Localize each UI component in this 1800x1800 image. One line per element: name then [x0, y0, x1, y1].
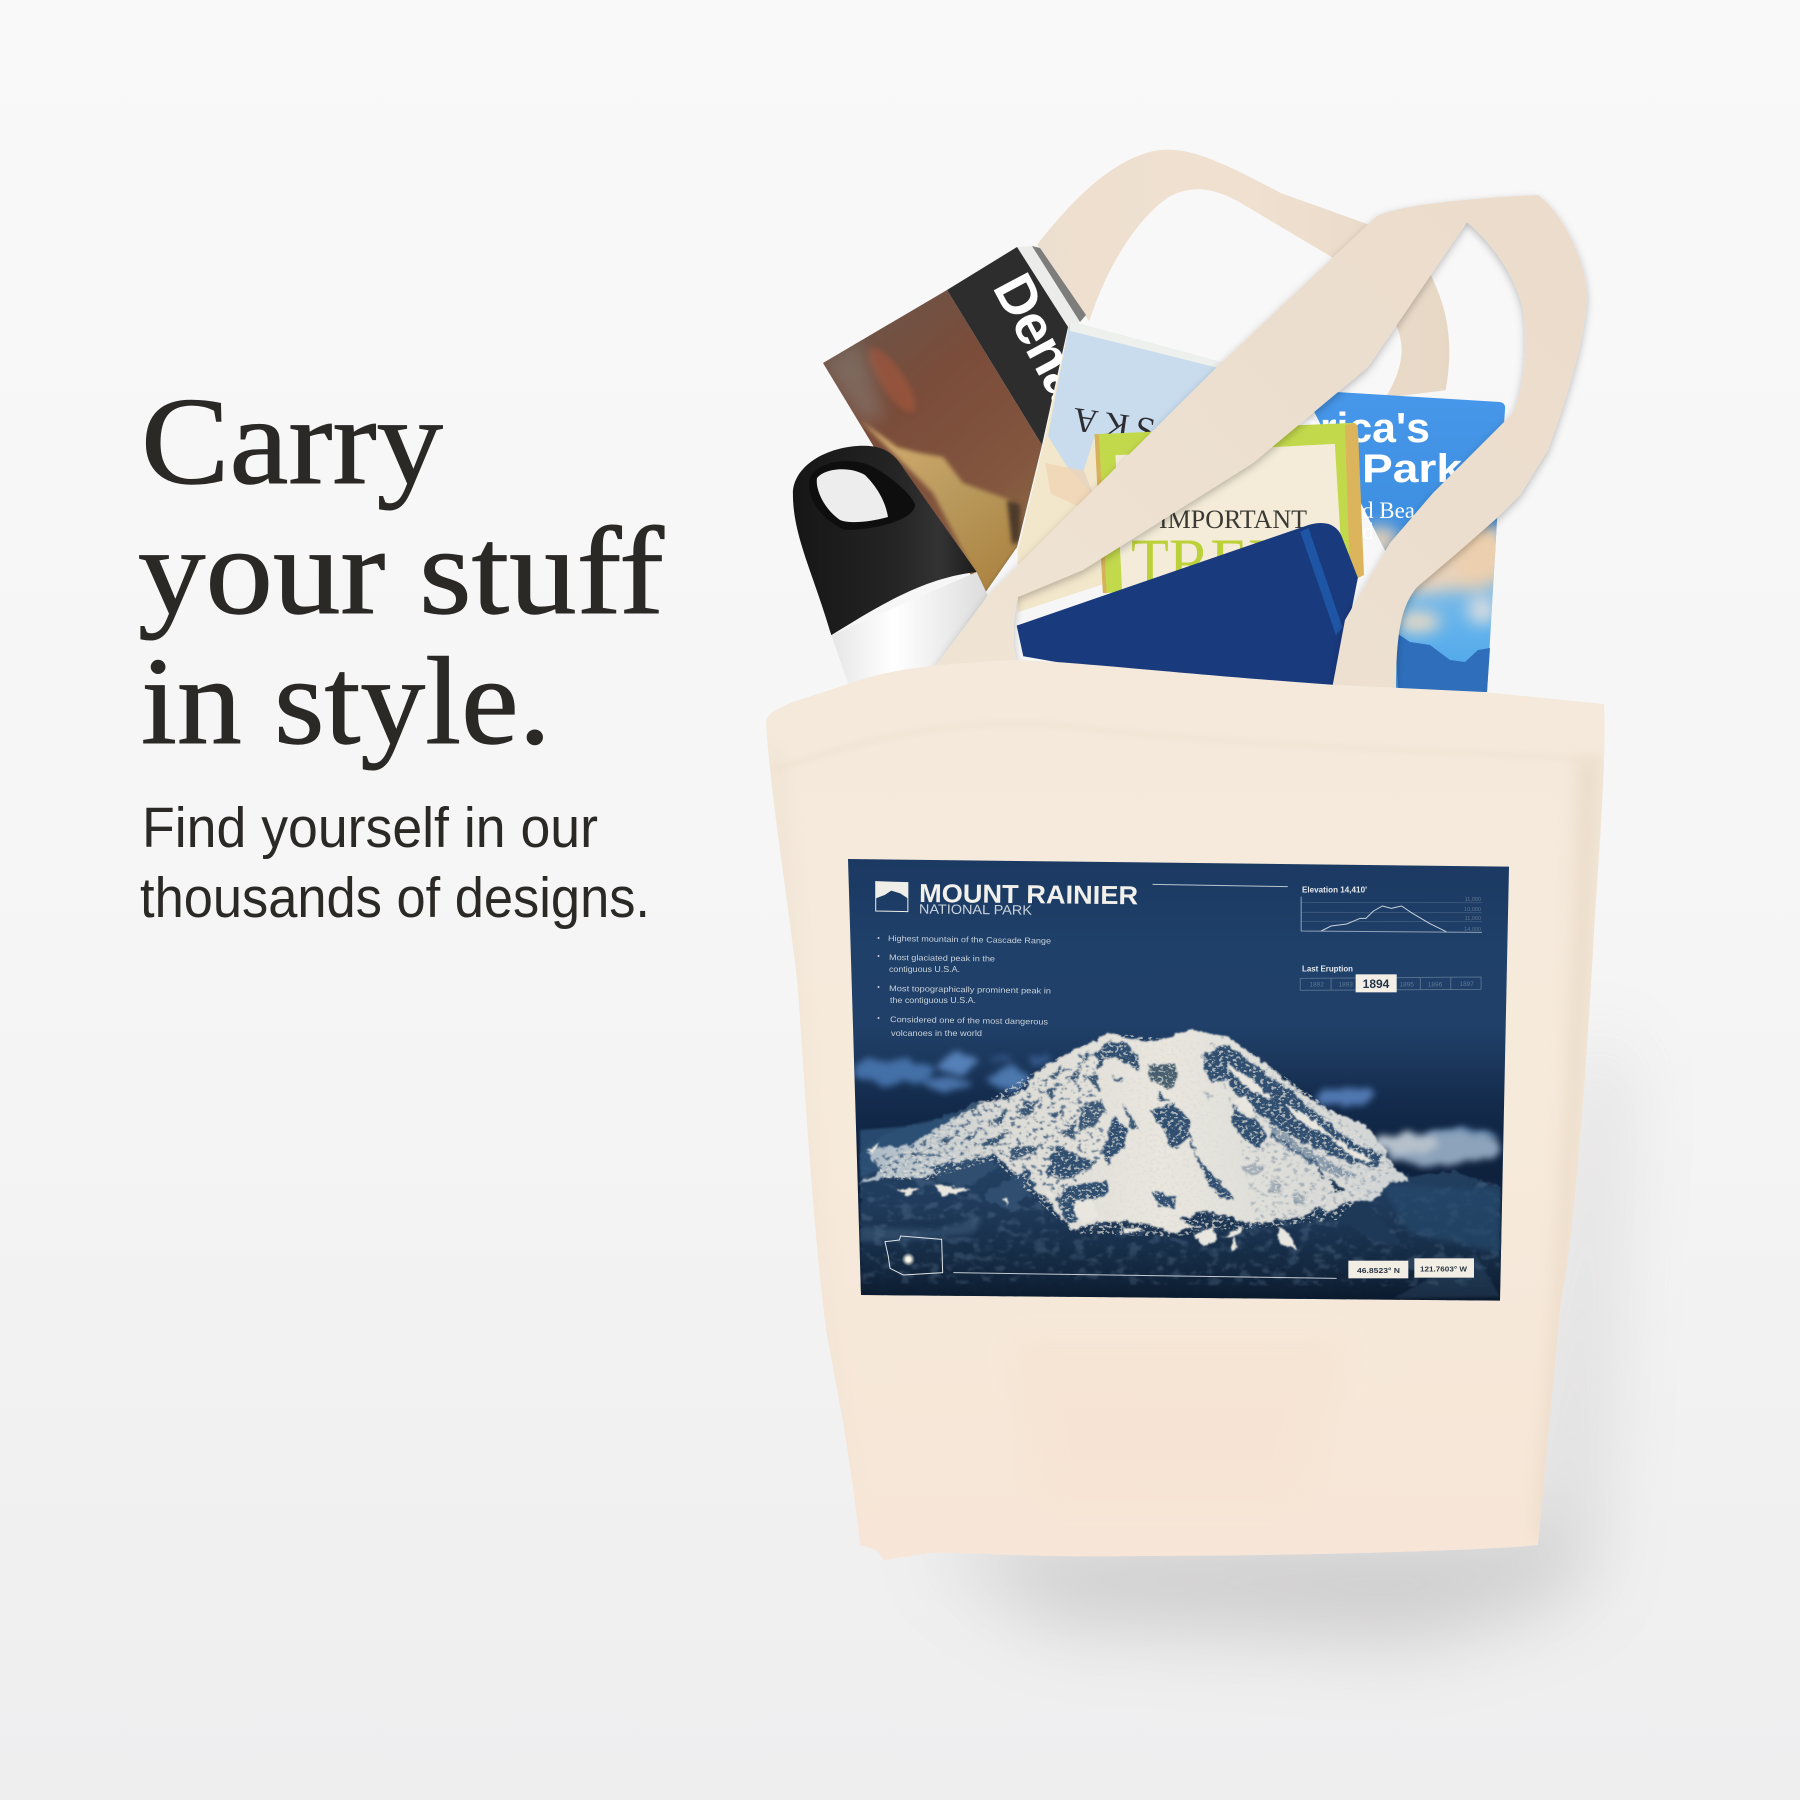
poster bullet list: contiguous U.S.A.	[889, 965, 960, 974]
blue cover	[1303, 390, 1505, 692]
locator and coordinate boxes	[885, 1236, 1474, 1278]
poster bullet list: volcanoes in the world	[891, 1029, 982, 1038]
eruption labels: 1894	[1363, 977, 1390, 991]
lower left mist	[860, 1217, 983, 1242]
golden peak	[860, 420, 1017, 593]
notebook	[1017, 523, 1358, 689]
page shadow	[1032, 246, 1086, 322]
terrain texture	[860, 1167, 1500, 1287]
snow	[860, 1030, 1410, 1233]
headline: Carry	[141, 373, 444, 511]
elevation labels: 10,000	[1464, 907, 1481, 913]
logo icon	[876, 882, 908, 912]
subheading: thousands of designs.	[140, 866, 650, 930]
cover title: Park	[1362, 447, 1463, 491]
bag shadow	[930, 1040, 1615, 1640]
peak shadow	[1007, 500, 1020, 545]
cover title: d Bea	[1362, 498, 1415, 523]
book page edge	[1017, 246, 1082, 330]
latitude box	[1348, 1261, 1408, 1278]
coordinates text: 121.7603° W	[1420, 1264, 1468, 1274]
book: Denali guide	[823, 246, 1113, 593]
snow flecks right flank	[1207, 1040, 1400, 1220]
eruption labels: 1892	[1309, 982, 1324, 988]
terrain	[860, 1110, 1500, 1301]
bag left side shading	[768, 740, 860, 1530]
poster bullet list: Most glaciated peak in the	[889, 953, 996, 963]
eruption labels: Last Eruption	[1302, 963, 1353, 973]
longitude box	[1414, 1258, 1474, 1278]
map title: ALASKA	[1064, 399, 1247, 461]
book: important trees	[1095, 423, 1364, 600]
cover title: erica's	[1296, 404, 1430, 451]
headline	[138, 373, 664, 771]
cap opening rim	[809, 461, 915, 530]
subheading: Find yourself in our	[142, 796, 598, 860]
poster bullet list	[878, 934, 1052, 1038]
white clouds	[1377, 1132, 1502, 1165]
elevation labels: 14,000	[1464, 927, 1481, 933]
eruption labels	[1302, 963, 1474, 991]
eruption labels: 1896	[1428, 982, 1443, 988]
book title: Denali	[981, 263, 1113, 436]
elevation labels: 11,000	[1465, 897, 1481, 903]
diagonal strap	[925, 195, 1587, 689]
book: blue national parks	[1314, 392, 1506, 692]
eruption timeline boxes	[1300, 977, 1481, 990]
cover sky clouds	[1362, 520, 1515, 632]
snow flecks left flank	[873, 1053, 1107, 1197]
cover title: d	[1362, 519, 1374, 544]
bag right side shading	[1540, 762, 1600, 1509]
gold spine	[1345, 423, 1364, 582]
elevation labels: 11,000	[1465, 916, 1481, 922]
poster bullet list: Most topographically prominent peak in	[889, 984, 1051, 996]
cover title	[1296, 404, 1463, 544]
lower rule	[953, 1273, 1337, 1278]
green book title: IMPORTANT	[1159, 505, 1307, 534]
subheading	[140, 796, 650, 930]
cap opening	[817, 469, 888, 522]
snow streaks	[867, 1063, 1377, 1250]
state outline	[885, 1236, 943, 1275]
left fade	[823, 340, 885, 420]
poster bullet list: the contiguous U.S.A.	[890, 996, 976, 1005]
poster bullet list: Considered one of the most dangerous	[890, 1015, 1048, 1026]
coordinates text	[1357, 1264, 1468, 1275]
eruption labels: 1893	[1338, 982, 1353, 988]
1894 highlight	[1356, 974, 1397, 992]
water bottle	[793, 446, 988, 691]
elevation labels	[1302, 884, 1481, 933]
black band	[947, 247, 1068, 445]
coordinates text: 46.8523° N	[1357, 1266, 1400, 1275]
eruption labels: 1895	[1399, 982, 1414, 988]
green book word: TREE	[1131, 524, 1286, 600]
bag top hem	[775, 723, 1600, 770]
printed poster	[848, 859, 1509, 1301]
bag pink blush	[1010, 1340, 1350, 1500]
headline: your stuff	[138, 503, 664, 641]
left mist	[859, 1117, 952, 1176]
tote bag body	[766, 660, 1605, 1560]
light specks over rock	[880, 1033, 1393, 1237]
red cliff	[868, 346, 916, 413]
fold wedge	[1393, 1253, 1500, 1298]
location dot	[902, 1253, 915, 1266]
elevation labels: Elevation 14,410'	[1302, 884, 1367, 894]
poster sky	[848, 859, 1509, 1301]
poster heading: MOUNT RAINIER	[919, 878, 1138, 910]
cover mountains	[1395, 632, 1490, 692]
title rule	[1153, 884, 1288, 887]
eruption labels: 1897	[1459, 981, 1474, 988]
headline: in style.	[141, 633, 551, 771]
cover details	[823, 340, 1020, 593]
clouds	[855, 1053, 1497, 1144]
front handle	[925, 195, 1587, 689]
cover photo	[823, 290, 1042, 593]
elevation chart	[1301, 897, 1482, 932]
book: Alaska map	[1018, 321, 1247, 612]
poster heading: NATIONAL PARK	[919, 902, 1032, 918]
right terrain haze	[1380, 1183, 1500, 1253]
poster bullet list: Highest mountain of the Cascade Range	[888, 934, 1052, 946]
rock patches	[910, 1042, 1403, 1247]
back handle	[1037, 150, 1449, 398]
poster graphics	[876, 882, 1482, 992]
